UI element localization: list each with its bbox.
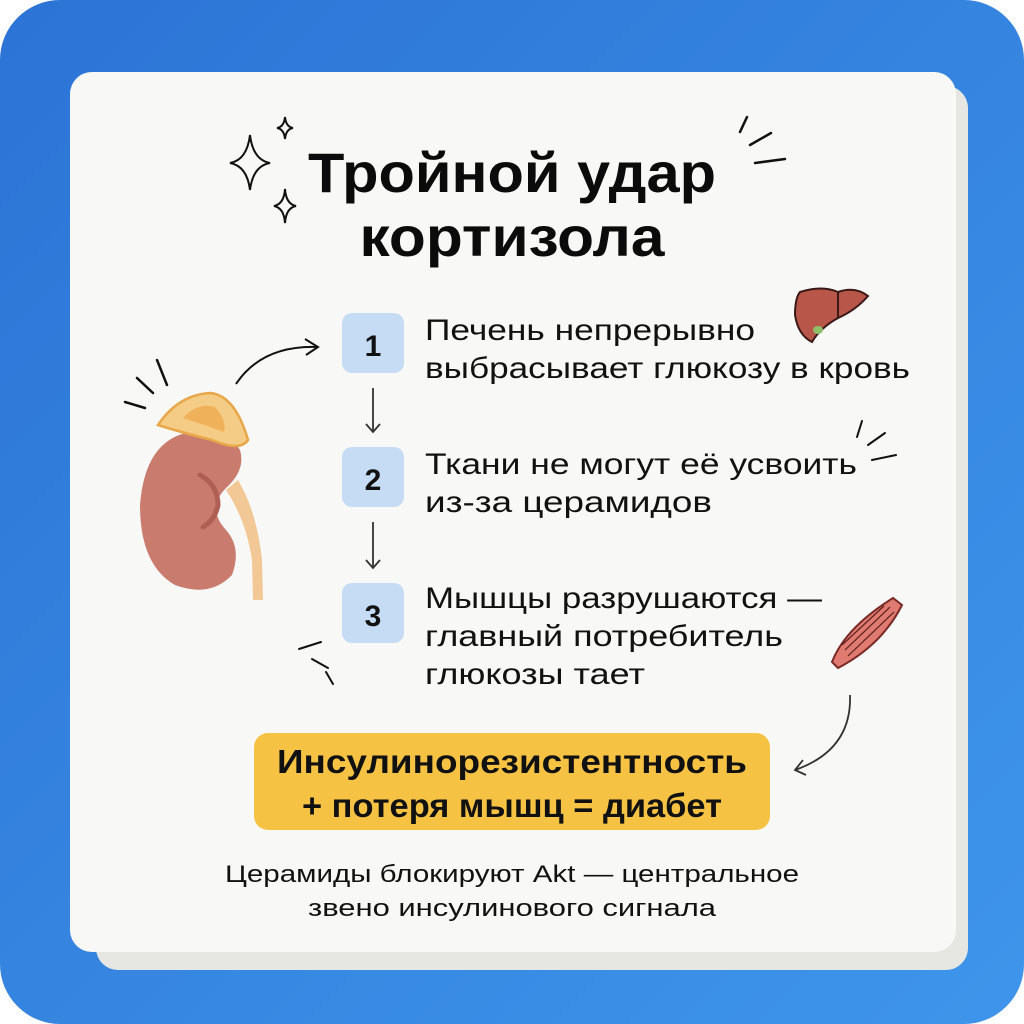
- step 3: главный потребитель: [425, 620, 783, 653]
- sparkles: [230, 117, 296, 223]
- arrow: kidney to step 1: [236, 339, 318, 384]
- result box: + потеря мышц = диабет: [302, 787, 722, 824]
- step 1: [342, 313, 910, 385]
- arrow: muscle to result: [795, 695, 850, 775]
- result box: [254, 733, 770, 830]
- step 2: Ткани не могут её усвоить: [425, 448, 857, 481]
- burst lines right of step 2: [857, 421, 896, 460]
- step 3: [342, 582, 822, 691]
- title: Тройной удар: [308, 141, 716, 204]
- step 1: 1: [365, 330, 381, 363]
- icon: kidney with adrenal gland: [125, 360, 263, 600]
- result box: Инсулинорезистентность: [277, 743, 747, 780]
- footer note: [225, 861, 799, 922]
- icon: liver: [795, 288, 868, 342]
- back card: [96, 86, 968, 970]
- step 3: 3: [365, 600, 381, 633]
- front card: [70, 72, 956, 952]
- icon: muscle: [832, 598, 902, 668]
- burst lines top right: [740, 117, 785, 163]
- footer note: звено инсулинового сигнала: [308, 895, 717, 922]
- step 2: [342, 447, 857, 519]
- step 2: 2: [365, 464, 381, 497]
- step 1: Печень непрерывно: [425, 314, 755, 347]
- footer note: Церамиды блокируют Akt — центральное: [225, 861, 799, 888]
- step 3: Мышцы разрушаются —: [425, 582, 822, 615]
- burst lines left of step 3: [299, 642, 333, 684]
- title: кортизола: [360, 205, 665, 268]
- step 1: выбрасывает глюкозу в кровь: [425, 352, 910, 385]
- step 2: из-за церамидов: [425, 486, 712, 519]
- arrow down 1-2: [366, 388, 380, 432]
- step 3: глюкозы тает: [425, 658, 645, 691]
- title: [308, 141, 716, 268]
- arrow down 2-3: [366, 522, 380, 568]
